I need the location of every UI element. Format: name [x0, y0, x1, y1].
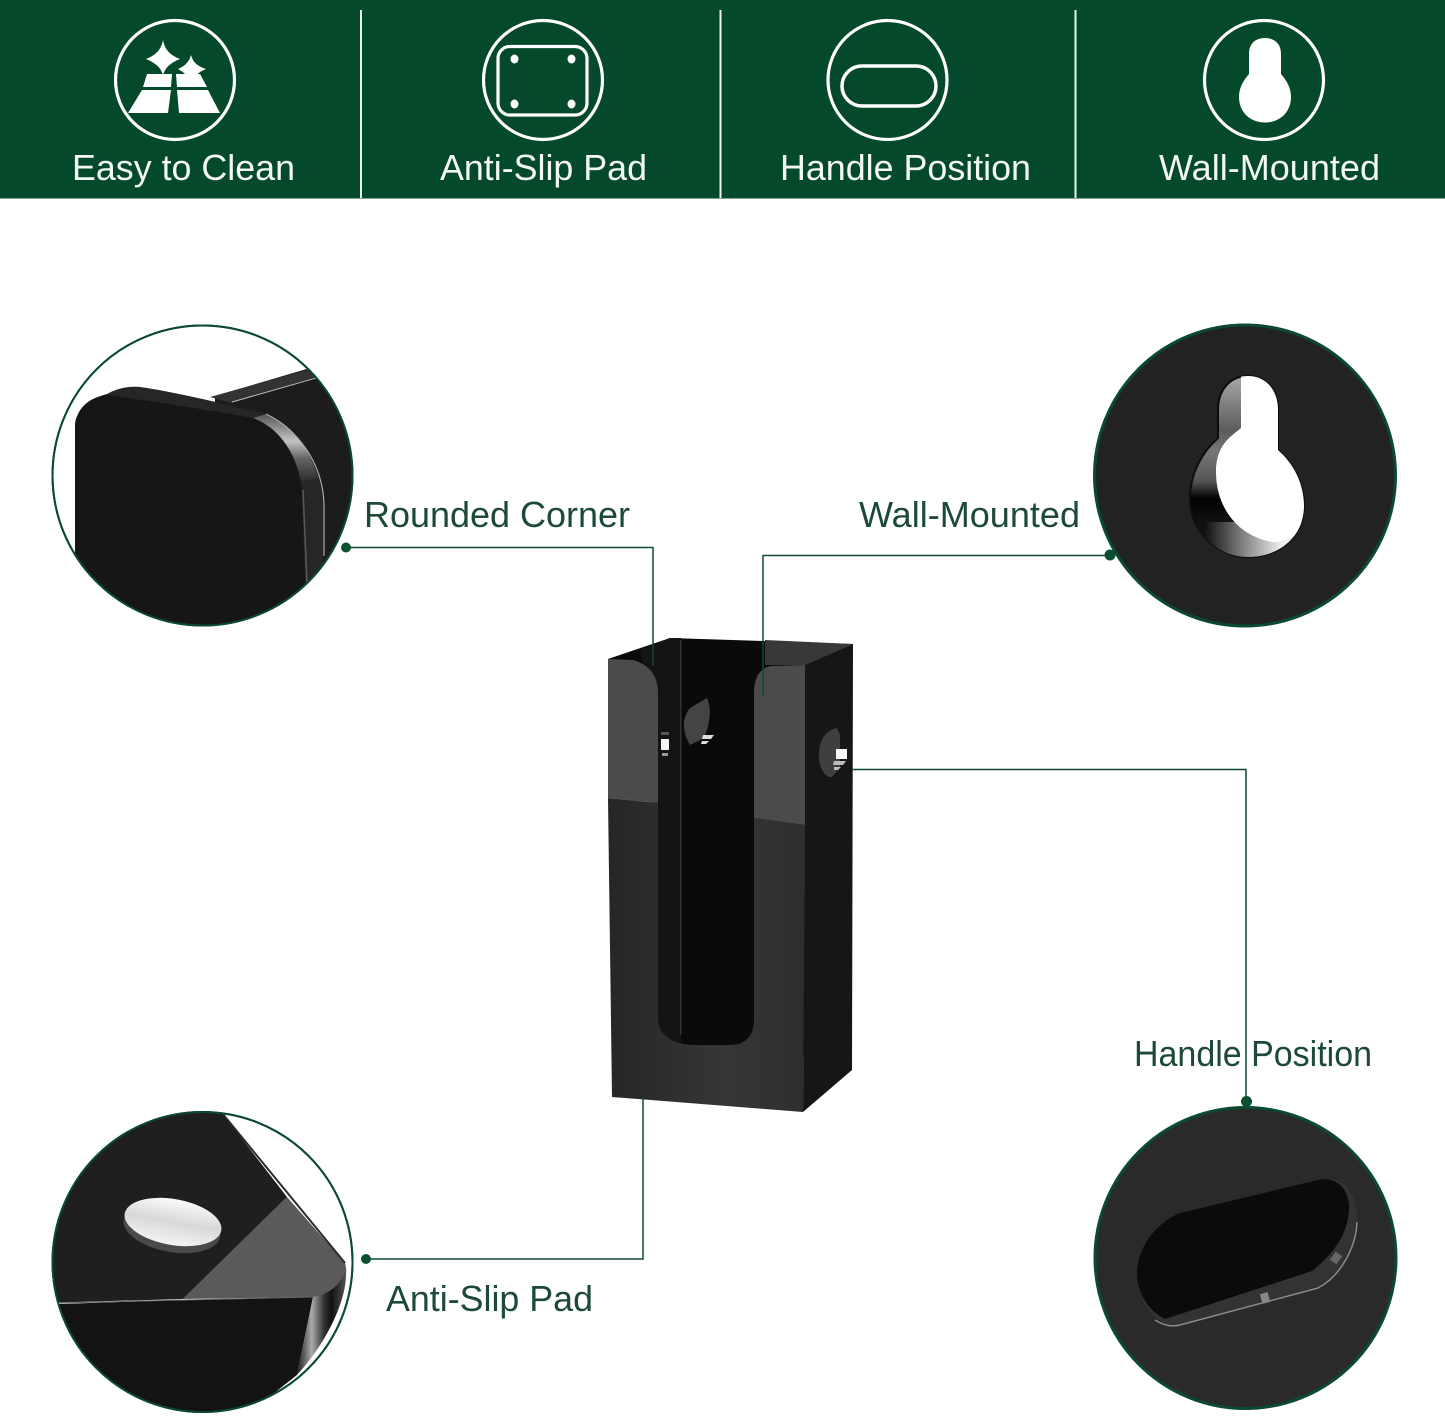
rim highlight — [253, 414, 318, 482]
lower face — [60, 1298, 313, 1411]
label: handle position: Handle Position — [1134, 1033, 1372, 1074]
front panel lower — [608, 798, 805, 1112]
leader line: wall-mounted — [763, 550, 1116, 696]
detail circle: anti-slip pad — [40, 1100, 352, 1420]
leader line: rounded corner — [341, 542, 653, 666]
label: anti-slip pad: Anti-Slip Pad — [440, 147, 647, 188]
back plate — [215, 369, 352, 563]
plate front face — [75, 395, 307, 640]
slot side hole glint — [661, 732, 669, 756]
inner top right wall reflection — [765, 640, 853, 665]
glossy corner edge — [297, 1270, 346, 1375]
detail circle: wall-mounted keyhole — [1094, 325, 1396, 626]
label: rounded corner: Rounded Corner — [364, 494, 630, 535]
label: easy to clean: Easy to Clean — [72, 147, 295, 188]
leader line: handle position — [852, 770, 1252, 1107]
icon: wall-mounted — [1204, 20, 1324, 140]
label: wall-mounted: Wall-Mounted — [859, 494, 1080, 535]
keyhole — [1190, 376, 1304, 557]
plate rim — [75, 386, 323, 583]
slot interior — [1137, 1179, 1349, 1319]
label: anti-slip pad: Anti-Slip Pad — [386, 1278, 593, 1319]
side handle hole — [819, 728, 847, 777]
right side face — [803, 644, 853, 1112]
front panel upper reflection — [608, 659, 805, 825]
glossy reflection — [183, 1197, 346, 1299]
label: handle position: Handle Position — [780, 147, 1031, 188]
base surface — [54, 1113, 287, 1302]
rear interior — [608, 638, 853, 1055]
icon: easy to clean — [116, 20, 234, 140]
back wall hole — [684, 698, 714, 745]
leader line: anti-slip pad — [361, 1098, 643, 1264]
product: black cup holder — [608, 638, 853, 1112]
detail circle: rounded corner — [52, 326, 370, 640]
top edge line — [222, 1113, 345, 1263]
inner left wall — [640, 638, 681, 1055]
icon: anti-slip pad — [484, 20, 602, 140]
header banner — [0, 0, 1445, 198]
icon: handle position — [828, 20, 947, 140]
label: wall-mounted: Wall-Mounted — [1159, 147, 1380, 188]
detail circle: handle slot — [1095, 1108, 1396, 1408]
slot rim — [1137, 1179, 1357, 1326]
rim highlight line — [1155, 1222, 1357, 1326]
rubber pad — [124, 1216, 220, 1254]
